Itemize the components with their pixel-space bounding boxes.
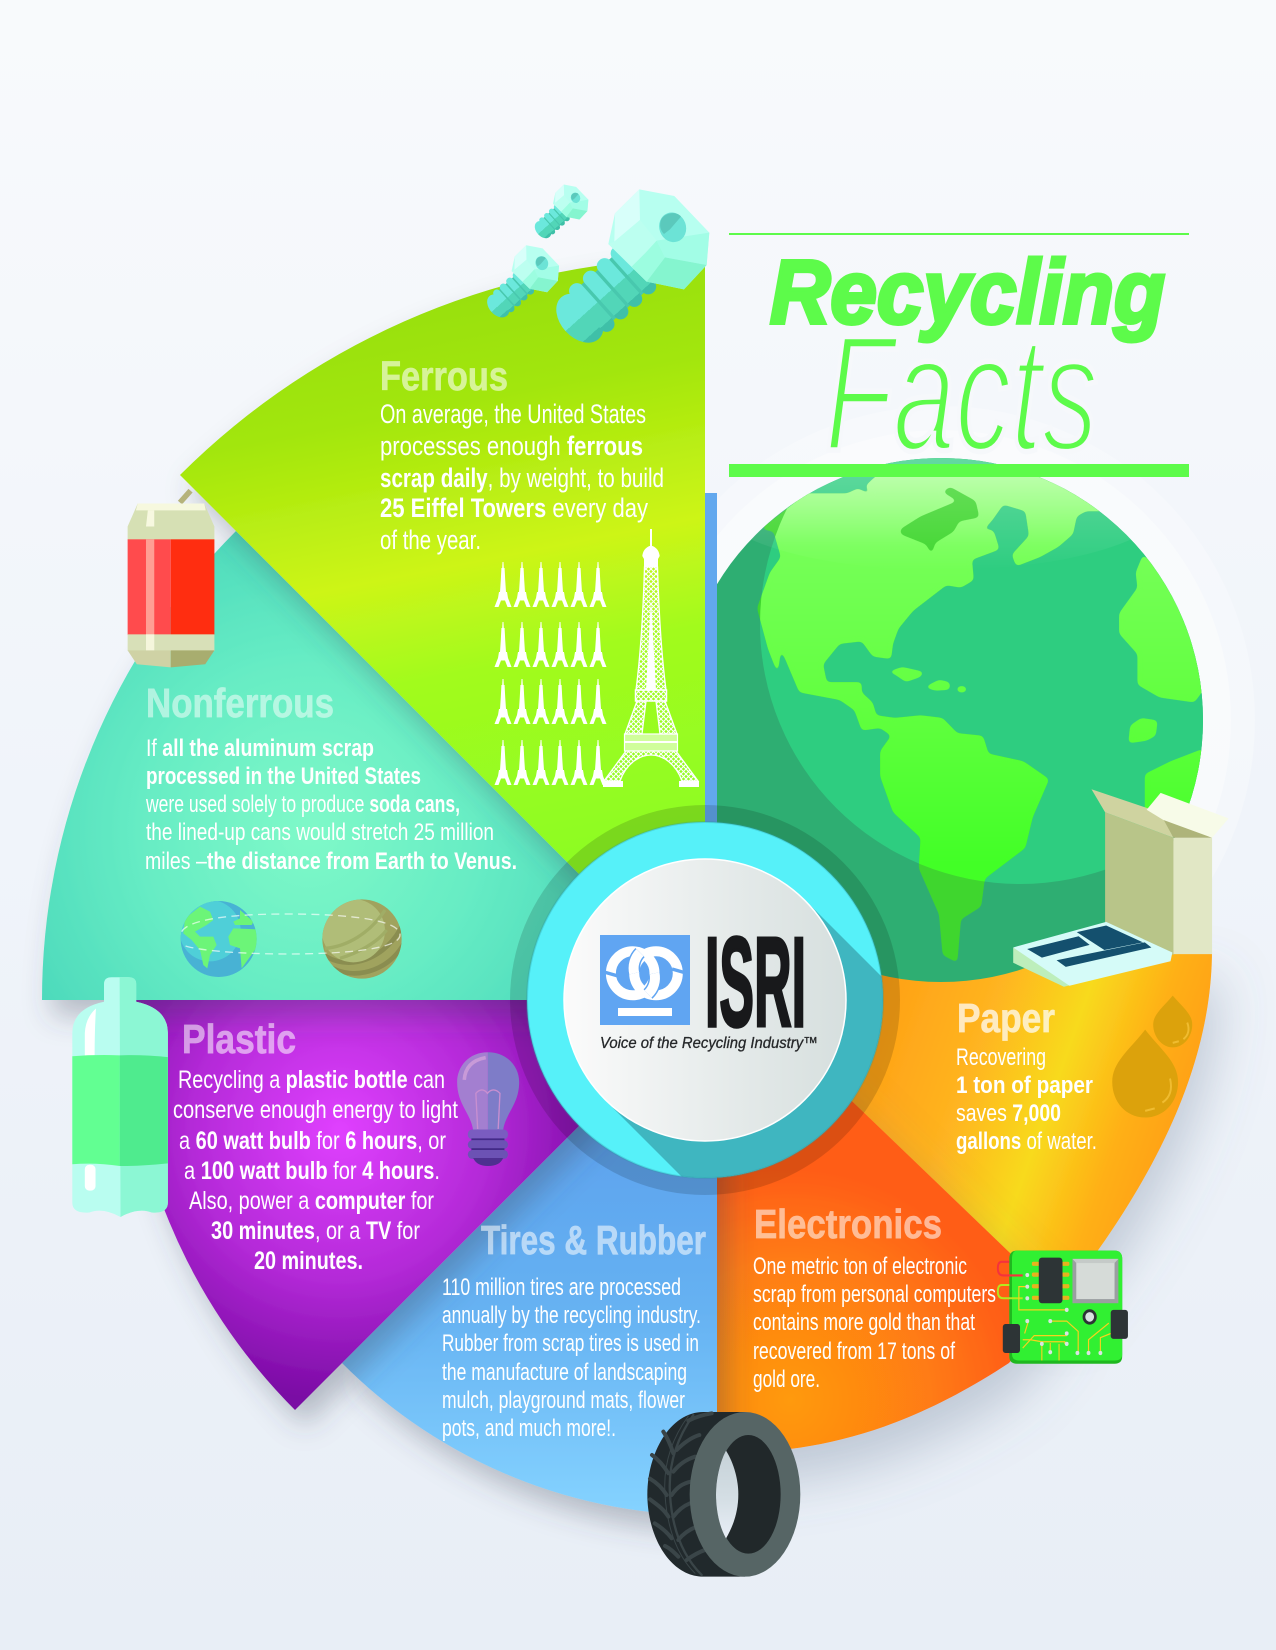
continents in shadow	[757, 476, 1104, 963]
globe	[717, 458, 1203, 982]
text: tires and rubber: the manufacture of landscaping	[442, 1359, 687, 1386]
text: nonferrous: the lined-up cans would stretch 25 million	[146, 819, 494, 846]
text: electronics: scrap from personal computers	[753, 1281, 996, 1308]
icon: soda can	[128, 491, 214, 667]
text: nonferrous: If all the aluminum scrap	[146, 735, 374, 762]
icon: water drops	[1112, 996, 1192, 1117]
text: electronics: One metric ton of electronic	[753, 1253, 967, 1280]
text: tires and rubber: annually by the recycling industry.	[442, 1302, 701, 1329]
text: nonferrous: were used solely to produce soda cans,	[145, 791, 460, 818]
text: electronics	[753, 1201, 996, 1393]
panel: electronics	[705, 960, 1060, 1458]
logo tagline: Voice of the Recycling Industry™	[600, 1035, 818, 1052]
text: electronics: gold ore.	[753, 1366, 820, 1393]
text: ferrous: scrap daily, by weight, to build	[380, 463, 664, 493]
text: ferrous: Ferrous	[380, 353, 508, 399]
title: Facts	[825, 301, 1098, 485]
text: paper	[956, 995, 1097, 1155]
text: plastic: conserve enough energy to light	[173, 1096, 458, 1124]
title	[729, 233, 1189, 485]
text: tires and rubber	[442, 1217, 706, 1442]
text: plastic: Also, power a computer for	[189, 1187, 434, 1215]
text: tires and rubber: mulch, playground mats, flower	[442, 1387, 685, 1414]
icon: bolts	[482, 185, 709, 353]
text: nonferrous: miles –the distance from Earth to Venus.	[145, 848, 517, 875]
text: ferrous: processes enough ferrous	[380, 431, 643, 461]
text: ferrous	[380, 353, 664, 555]
icon: Eiffel towers	[494, 529, 699, 787]
center badge	[510, 805, 900, 1195]
text: plastic	[173, 1016, 458, 1275]
panel: plastic	[125, 1000, 705, 1410]
text: plastic: 20 minutes.	[254, 1247, 363, 1275]
text: electronics: recovered from 17 tons of	[753, 1338, 955, 1365]
ISRI logo mark	[600, 935, 690, 1025]
text: paper: gallons of water.	[956, 1128, 1097, 1155]
text: nonferrous: Nonferrous	[146, 680, 334, 726]
icon: plastic bottle	[72, 977, 168, 1217]
text: tires and rubber: Tires & Rubber	[481, 1217, 706, 1263]
text: ferrous: of the year.	[380, 525, 481, 555]
text: paper: saves 7,000	[956, 1100, 1061, 1127]
icon: circuit board	[998, 1251, 1128, 1364]
panel: nonferrous	[42, 531, 705, 1000]
icon: planets Earth and Venus	[179, 899, 407, 979]
icon: box and newspaper	[1013, 789, 1229, 987]
text: plastic: a 100 watt bulb for 4 hours.	[184, 1157, 440, 1185]
text: nonferrous: processed in the United States	[146, 763, 421, 790]
text: tires and rubber: 110 million tires are processed	[442, 1274, 681, 1301]
text: plastic: a 60 watt bulb for 6 hours, or	[179, 1127, 446, 1155]
text: nonferrous	[145, 680, 517, 875]
text: paper: Recovering	[956, 1044, 1046, 1071]
text: paper: Paper	[957, 995, 1055, 1041]
text: tires and rubber: Rubber from scrap tires is used in	[442, 1330, 699, 1357]
text: electronics: contains more gold than that	[753, 1309, 975, 1336]
title: Recycling	[770, 243, 1165, 343]
text: plastic: Plastic	[182, 1016, 296, 1062]
text: plastic: Recycling a plastic bottle can	[178, 1066, 445, 1094]
center badge: ISRI	[705, 911, 806, 1053]
text: tires and rubber: pots, and much more!.	[442, 1415, 616, 1442]
text: ferrous: 25 Eiffel Towers every day	[380, 493, 648, 523]
icon: light bulb	[457, 1052, 519, 1166]
continents lit	[760, 477, 1202, 882]
text: plastic: 30 minutes, or a TV for	[211, 1217, 420, 1245]
text: paper: 1 ton of paper	[956, 1072, 1093, 1099]
panel: ferrous	[180, 266, 705, 885]
panel: paper	[705, 950, 1212, 1301]
globe halo	[627, 406, 1255, 1034]
panel: tires and rubber	[342, 1000, 717, 1515]
text: electronics: Electronics	[754, 1201, 942, 1247]
blue divider strip	[705, 493, 717, 893]
icon: tire	[647, 1412, 800, 1577]
text: ferrous: On average, the United States	[380, 399, 646, 429]
